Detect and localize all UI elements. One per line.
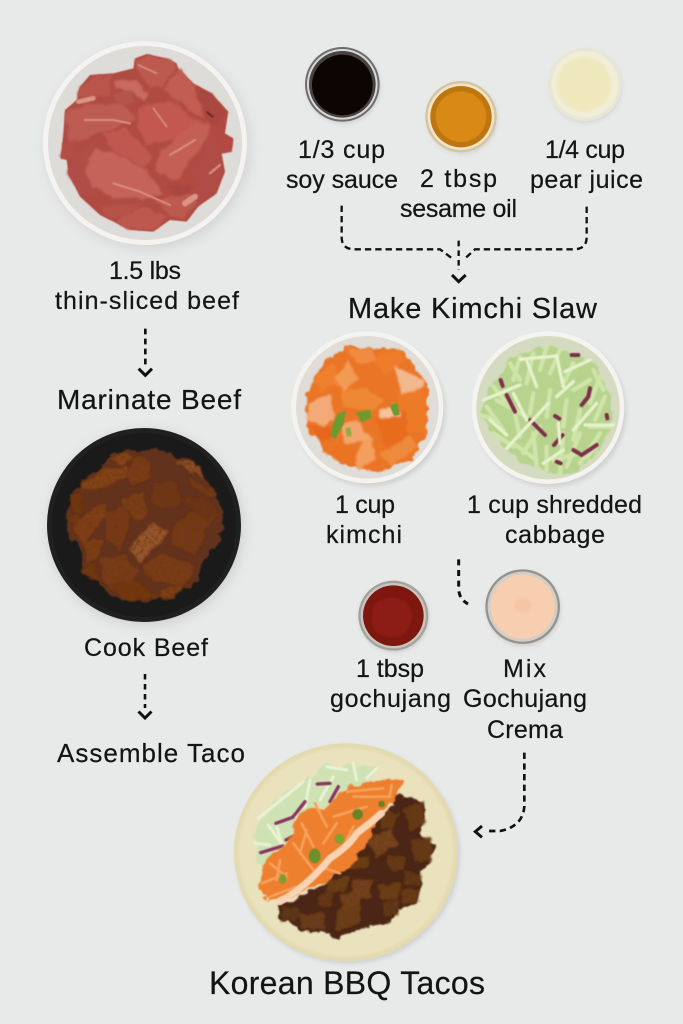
text: mix gochujang crema: [463, 655, 587, 744]
heading: make kimchi slaw: Make Kimchi Slaw: [348, 293, 598, 325]
arrow: crema to taco: [475, 753, 524, 837]
text: sesame oil: [400, 165, 517, 223]
text: pear juice: 1/4 cup: [545, 136, 625, 164]
panel: cabbage bowl: [472, 331, 626, 487]
text: pear juice: pear juice: [530, 166, 643, 194]
text: mix gochujang crema: Crema: [487, 716, 563, 744]
text: kimchi quantity: kimchi: [326, 521, 402, 549]
text: assemble taco: Assemble Taco: [57, 738, 245, 768]
icon: gochujang dish: [358, 581, 429, 652]
text: cook beef: Cook Beef: [84, 634, 208, 662]
kimchi slaw: [258, 778, 402, 902]
text: beef quantity: [55, 257, 239, 315]
text: mix gochujang crema: Mix: [503, 655, 546, 683]
arrow: cook to assemble: [138, 674, 152, 718]
icon: pear juice dish: [548, 48, 622, 123]
text: gochujang quantity: [330, 655, 451, 713]
panel: taco: [234, 743, 460, 964]
text: soy sauce: [286, 136, 398, 194]
panel: cooked beef bowl: [47, 428, 242, 624]
icon: sesame oil dish: [425, 81, 497, 154]
arrow: small dashed curve: [459, 559, 468, 604]
text: pear juice: [530, 136, 643, 194]
text: sesame oil: 2 tbsp: [420, 165, 497, 193]
icon: gochujang crema dish: [485, 569, 560, 646]
arrow: beef to marinate: [139, 329, 152, 375]
beef filling: [280, 780, 433, 938]
text: cabbage quantity: [467, 491, 642, 549]
text: mix gochujang crema: Gochujang: [463, 685, 587, 713]
icon: soy sauce dish: [305, 47, 380, 123]
text: cabbage quantity: 1 cup shredded: [467, 491, 642, 519]
cabbage layer: [255, 763, 380, 863]
heading: marinate beef: Marinate Beef: [57, 384, 241, 415]
text: sesame oil: sesame oil: [400, 195, 517, 223]
title: Korean BBQ Tacos: [209, 965, 485, 1001]
text: soy sauce: soy sauce: [286, 166, 398, 194]
text: kimchi quantity: [326, 491, 402, 549]
text: soy sauce: 1/3 cup: [298, 136, 385, 164]
text: gochujang quantity: 1 tbsp: [356, 655, 424, 683]
text: kimchi quantity: 1 cup: [335, 491, 395, 519]
text: cabbage quantity: cabbage: [505, 521, 605, 549]
text: beef quantity: 1.5 lbs: [109, 257, 181, 285]
panel: raw beef bowl: [43, 41, 249, 248]
crema drizzle: [280, 813, 382, 902]
panel: kimchi bowl: [291, 331, 445, 486]
text: beef quantity: thin-sliced beef: [55, 287, 239, 315]
arrow: sauces merge to kimchi slaw: [342, 206, 587, 282]
text: gochujang quantity: gochujang: [330, 685, 451, 713]
